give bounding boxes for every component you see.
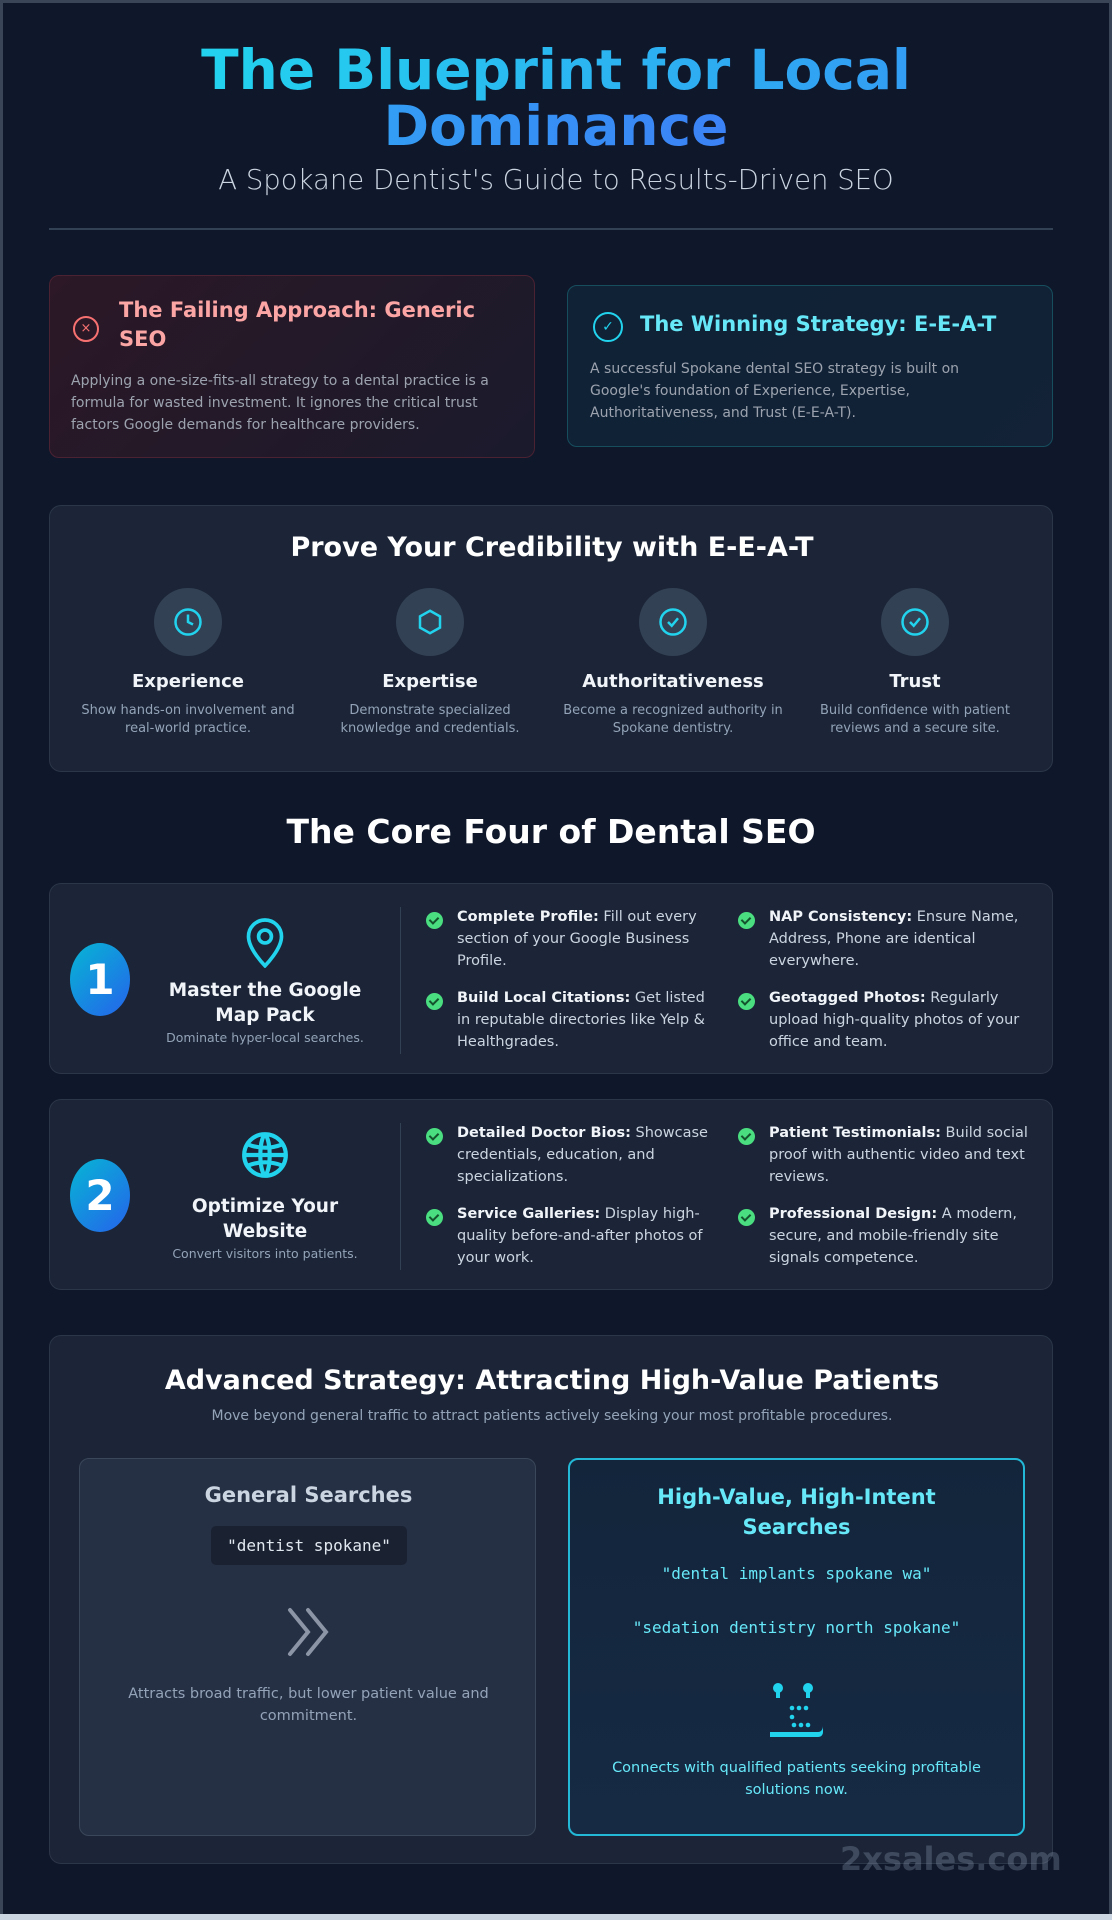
icon: check circle [593, 312, 623, 342]
box: high-value searches: High-Value, High-Intent [657, 1485, 936, 1509]
bullets: map pack: Complete Profile: Fill out every section of your Google Business Profile. [457, 909, 697, 969]
title [201, 38, 911, 158]
bullets: map pack [426, 909, 1020, 1050]
subtext: advanced: Move beyond general traffic to attract patients actively seeking your most profitable procedures. [212, 1408, 892, 1424]
heading: advanced: Advanced Strategy: Attracting High-Value Patients [165, 1365, 939, 1396]
panel: advanced strategy [49, 1335, 1053, 1864]
icon: tooth [770, 1683, 823, 1737]
heading: eeat: Prove Your Credibility with E-E-A-T [290, 532, 814, 563]
icon: check circle: ✓ [602, 319, 614, 335]
icon: x circle [73, 316, 99, 342]
item: expertise [340, 588, 520, 736]
panel: map pack [49, 883, 1053, 1074]
panel: E-E-A-T [49, 505, 1053, 772]
box: high-value searches: Connects with qualified patients seeking profitable solutions now. [612, 1760, 981, 1798]
box: general searches [79, 1458, 536, 1836]
bullets: website [426, 1125, 1028, 1266]
item: authoritativeness: Authoritativeness [582, 671, 764, 692]
box: general searches: Attracts broad traffic, but lower patient value and commitment. [128, 1686, 489, 1724]
item: experience [81, 588, 295, 736]
heading: winning: The Winning Strategy: E-E-A-T [640, 312, 996, 336]
icon: x circle: × [81, 321, 91, 336]
subtitle: A Spokane Dentist's Guide to Results-Driven SEO [218, 164, 894, 196]
number 2 [70, 1159, 130, 1232]
text: winning: A successful Spokane dental SEO strategy is built on Google's foundation of Experience, Expertise, Authoritativeness, and Trust (E-E-A-T). [590, 361, 959, 421]
code: sedation: "sedation dentistry north spokane" [633, 1618, 960, 1637]
bullets: map pack: NAP Consistency: Ensure Name, Address, Phone are identical everywhere. [769, 909, 1018, 969]
code: dentist spokane: "dentist spokane" [227, 1536, 391, 1555]
panel: website [49, 1099, 1053, 1290]
label: map pack [166, 980, 364, 1045]
item: expertise: Demonstrate specialized knowledge and credentials. [340, 703, 520, 736]
label: website [172, 1196, 358, 1261]
bullets: website: Patient Testimonials: Build social proof with authentic video and text reviews. [769, 1125, 1028, 1185]
icon: chevrons [288, 1608, 328, 1656]
code: implants: "dental implants spokane wa" [662, 1564, 931, 1583]
label: website: Website [223, 1221, 307, 1242]
label: map pack: Dominate hyper-local searches. [166, 1030, 364, 1045]
watermark: 2xsales.com [840, 1840, 1062, 1878]
label: website: Optimize Your [192, 1196, 338, 1217]
card: failing approach [49, 275, 535, 458]
icon: map pin [246, 918, 284, 968]
box: high-value searches [568, 1458, 1025, 1836]
bullets: map pack: Build Local Citations: Get listed in reputable directories like Yelp & Healthgrades. [457, 990, 705, 1050]
code: dentist spokane [211, 1526, 407, 1565]
bullets: website: Service Galleries: Display high-quality before-and-after photos of your work. [457, 1206, 702, 1266]
heading: core four: The Core Four of Dental SEO [286, 812, 816, 851]
card: winning strategy [567, 285, 1053, 447]
label: map pack: Master the Google [169, 980, 361, 1001]
item: authoritativeness: Become a recognized authority in Spokane dentistry. [563, 703, 783, 736]
icon: globe [242, 1132, 288, 1178]
number 2: 2 [85, 1171, 115, 1220]
box: general searches: General Searches [205, 1483, 412, 1507]
item: authoritativeness [563, 588, 783, 736]
bullets: website: Professional Design: A modern, secure, and mobile-friendly site signals competence. [769, 1206, 1017, 1266]
heading: failing: The Failing Approach: Generic SEO [119, 298, 475, 351]
item: trust [820, 588, 1010, 736]
box: high-value searches: Searches [742, 1515, 851, 1539]
number 1 [70, 943, 130, 1016]
item: trust: Trust [889, 671, 941, 692]
item: trust: Build confidence with patient reviews and a secure site. [820, 703, 1010, 736]
bullets: map pack: Geotagged Photos: Regularly upload high-quality photos of your office and team. [769, 990, 1019, 1050]
label: map pack: Map Pack [215, 1005, 315, 1026]
title: The Blueprint for Local [201, 38, 911, 102]
item: experience: Show hands-on involvement and real-world practice. [81, 703, 295, 736]
text: failing: Applying a one-size-fits-all strategy to a dental practice is a formula for wasted investment. It ignores the critical trust factors Google demands for healthcare providers. [71, 373, 489, 433]
title: Dominance [384, 94, 728, 158]
label: website: Convert visitors into patients. [172, 1246, 358, 1261]
item: experience: Experience [132, 671, 244, 692]
number 1: 1 [85, 955, 115, 1004]
item: expertise: Expertise [382, 671, 478, 692]
bullets: website: Detailed Doctor Bios: Showcase credentials, education, and specializations. [457, 1125, 708, 1185]
